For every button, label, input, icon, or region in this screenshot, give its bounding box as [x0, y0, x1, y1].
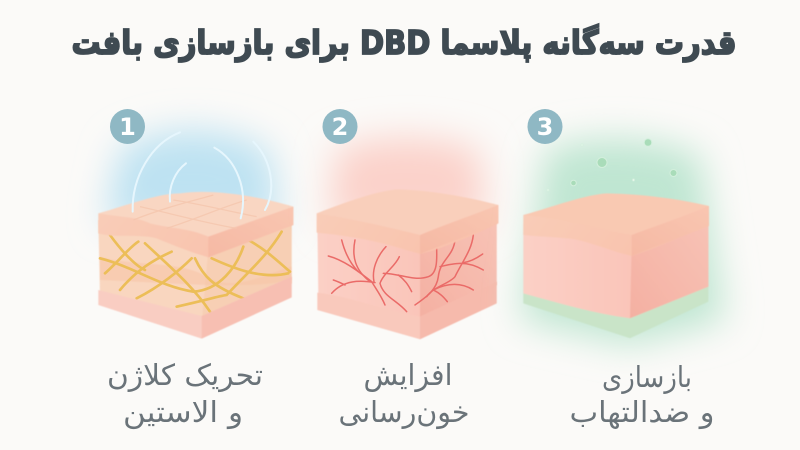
panel: collagen and elastin stimulation	[98, 109, 293, 429]
icon: healing bubbles	[547, 139, 677, 191]
badge: number 2: 2	[332, 113, 348, 141]
badge: number 3	[528, 109, 562, 144]
title: قدرت سه‌گانه پلاسما DBD برای بازسازی بافت	[72, 23, 736, 63]
icon: skin block with collagen fibres	[98, 132, 293, 339]
badge: number 3: 3	[537, 113, 553, 141]
badge: number 1: 1	[119, 113, 136, 141]
badge: number 1	[110, 109, 145, 144]
icon: skin block with blood vessels	[317, 189, 498, 339]
label: blood flow: خون‌رسانی	[338, 395, 470, 429]
label: collagen and elastin: تحریک کلاژن	[107, 358, 263, 392]
label: collagen and elastin	[107, 358, 263, 429]
glow: blue plasma	[105, 130, 280, 225]
label: regeneration and anti-inflammatory: و ضدالتهاب	[570, 395, 714, 429]
glow: green healing	[520, 139, 725, 345]
label: regeneration and anti-inflammatory	[570, 360, 714, 429]
badge: number 2	[322, 109, 358, 144]
label: regeneration and anti-inflammatory: بازسازی	[602, 360, 692, 394]
icon: skin block, smooth	[523, 193, 709, 338]
label: collagen and elastin: و الاستین	[123, 395, 243, 429]
glow: red blood flow	[330, 138, 485, 225]
panel: increased blood flow	[317, 109, 498, 429]
panel: regeneration and anti-inflammation	[520, 109, 725, 429]
label: blood flow: افزایش	[364, 358, 452, 392]
label: blood flow	[338, 358, 470, 429]
